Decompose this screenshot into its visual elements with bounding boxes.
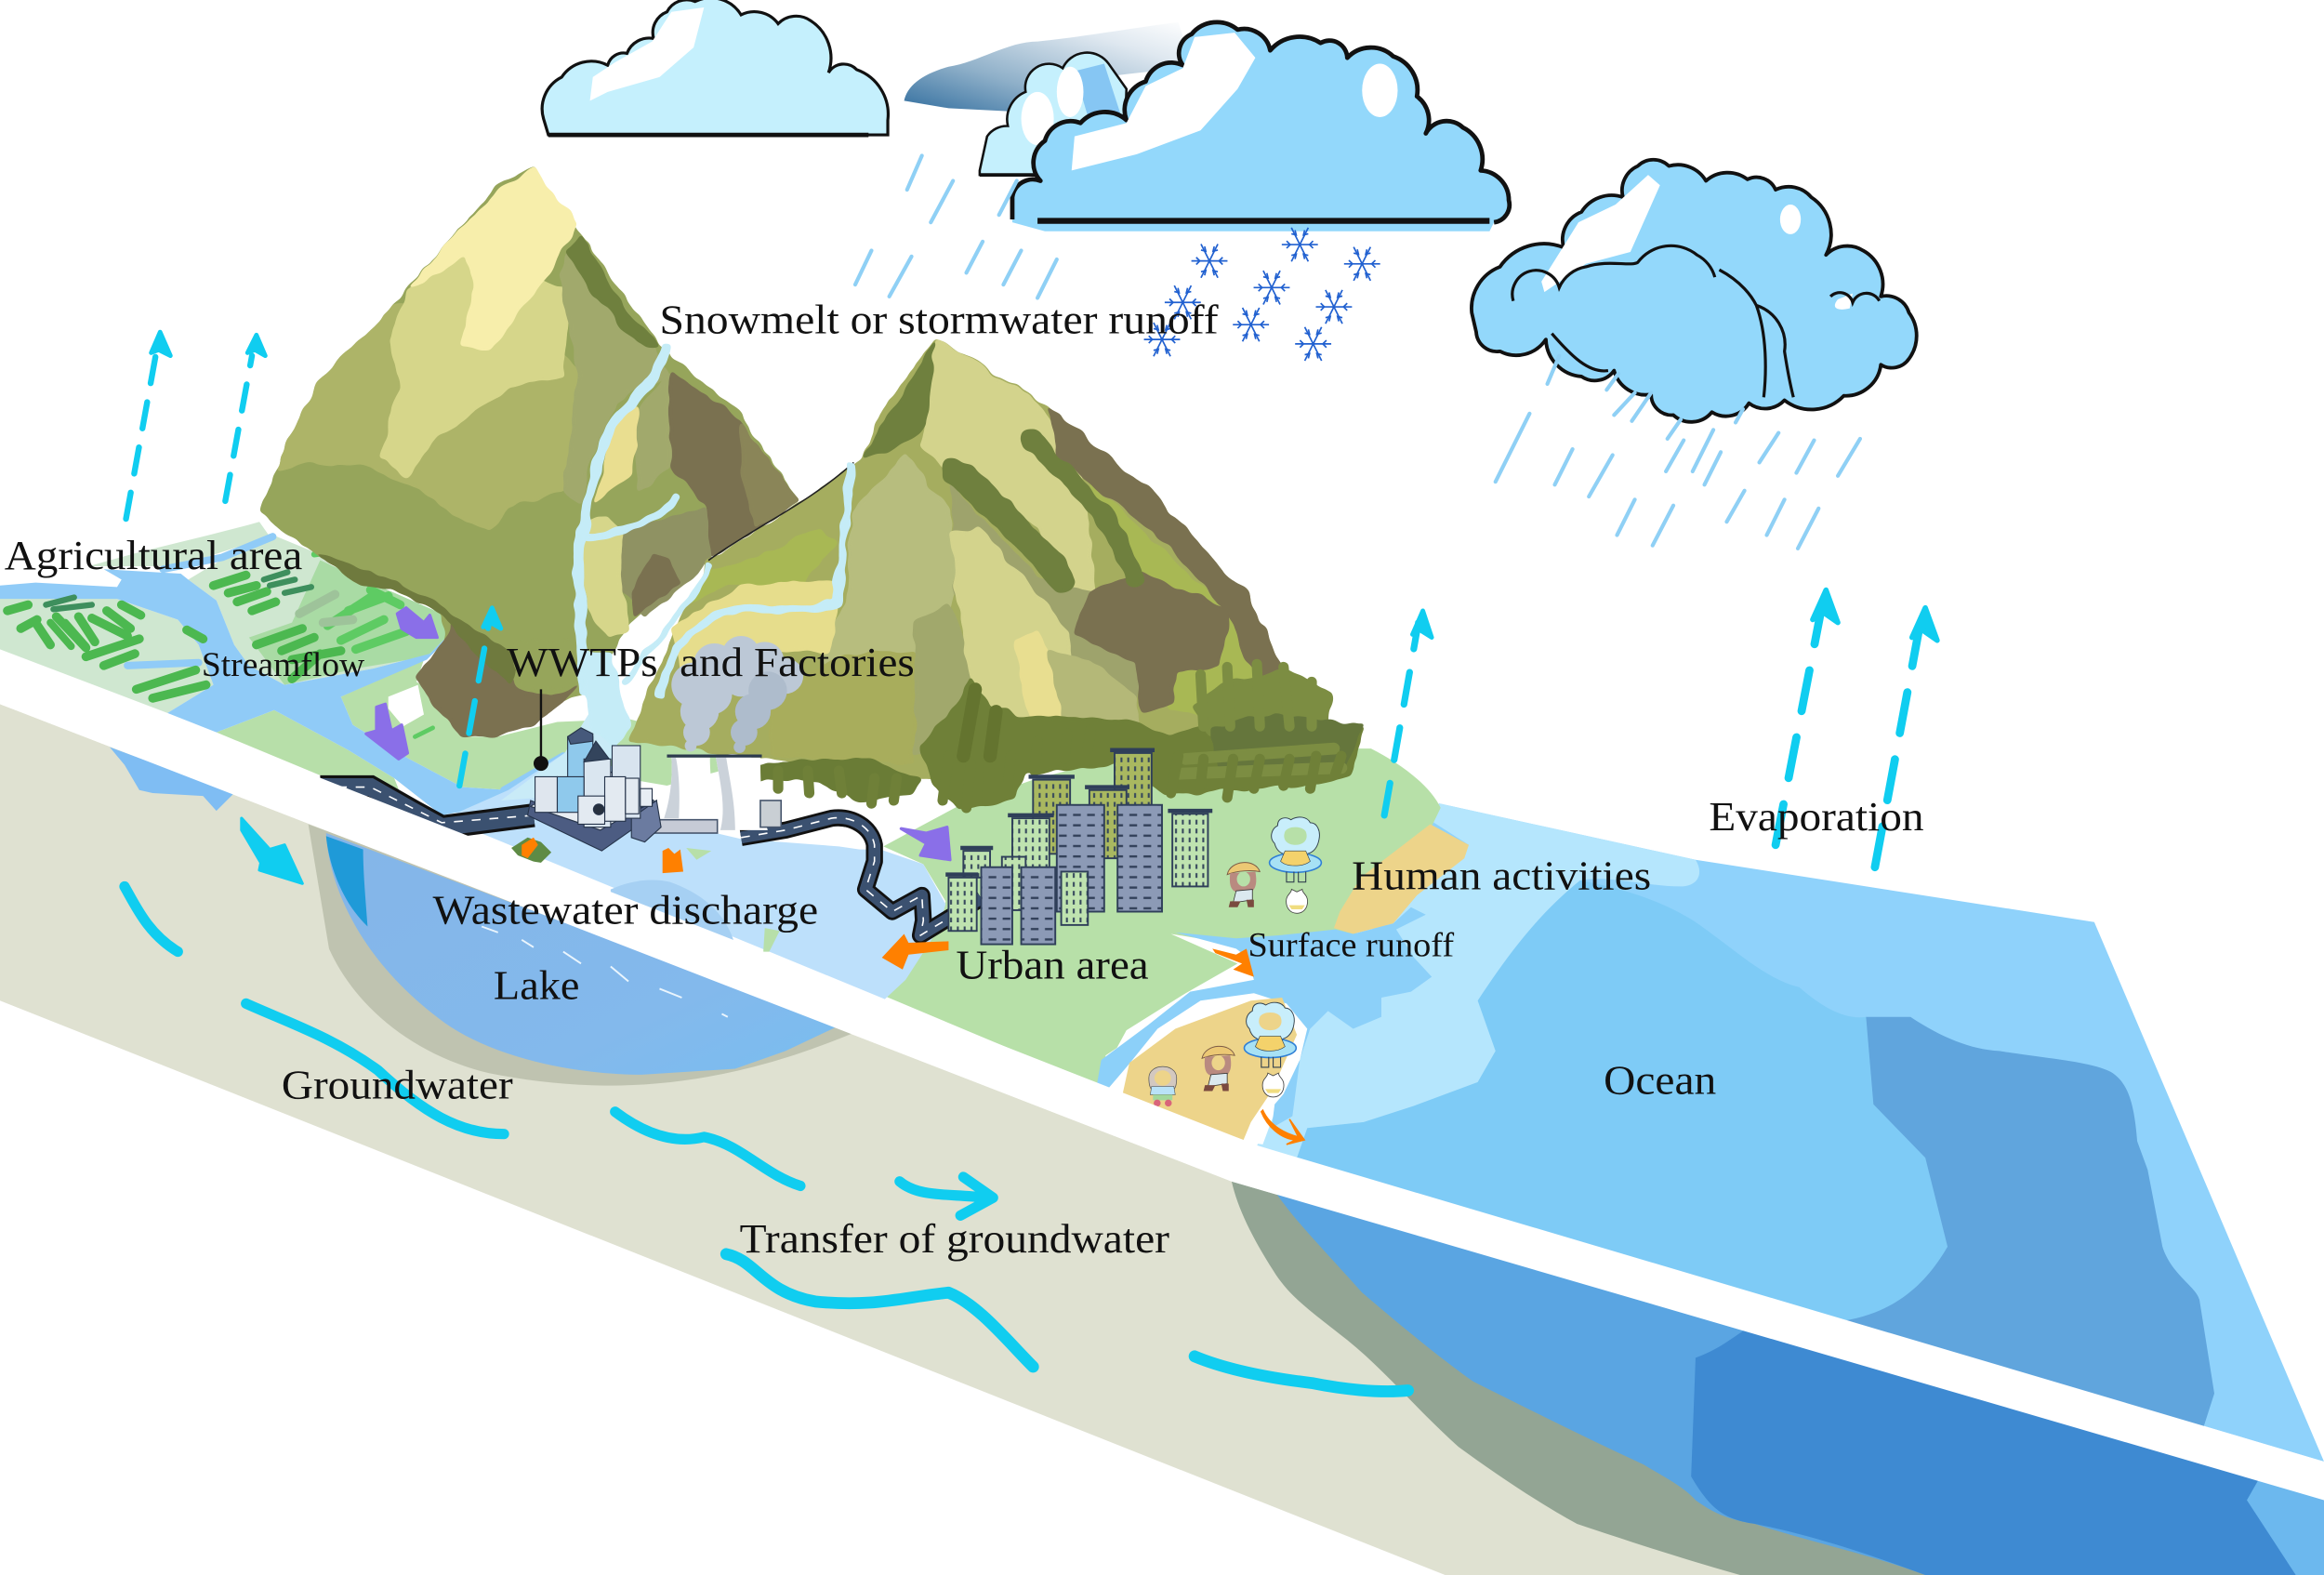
coastal shallows [1257,803,1699,1158]
divider: white surface strip [0,653,2324,1500]
icon: cloud small left [542,0,888,135]
icon: cloud large [1012,22,1510,232]
arrows: evaporation dashed [126,332,1937,867]
label: WWTPs and factories: WWTPs and Factories [507,639,915,685]
panel: land surface [0,522,1469,1145]
beach south [1122,998,1297,1140]
cloud inner outlines [1512,245,1880,397]
label: snowmelt: Snowmelt or stormwater runoff [660,297,1219,343]
icon: WWTP building complex [528,728,661,851]
crop rows [7,551,433,736]
icon: green land stubs under plant [511,838,711,863]
icon: left mountain [259,167,800,736]
labels [5,297,1924,1262]
label: wastewater discharge: Wastewater discharge [433,886,818,933]
icon: gray storm cloud [905,22,1193,112]
icon: cloud right [1472,160,1917,422]
icon: cloud middle back [980,53,1127,175]
icon: waterfalls [578,344,852,748]
small stream section [110,748,234,811]
icon: road left [320,788,534,827]
pale waterfall outflow [501,708,630,801]
urban green land [883,748,1441,1085]
arrows: purple inflow [366,608,950,860]
icon: snowflakes [1144,228,1380,361]
lake cross-section rim [309,824,860,1086]
thin channel [127,536,563,790]
icon: people at urban area [1227,817,1321,913]
label: lake: Lake [494,962,579,1009]
darker lake patch [611,880,735,946]
pale farmland left [0,593,214,713]
ocean medium depth zone [1297,880,1948,1322]
lake waves [482,926,728,1017]
deep sea cross-section [1691,1329,2296,1575]
ocean deep zone [1843,1017,2214,1431]
panel: underground cross-section [0,704,2324,1575]
inland green land lower [217,710,400,793]
label: evaporation: Evaporation [1709,793,1924,840]
wastewater lake surface [444,753,945,999]
rain under left clouds [855,155,1057,298]
icon: road right [741,818,981,935]
label: agricultural area: Agricultural area [5,532,302,578]
icon: right mountain [628,338,1292,778]
river and streamflow [0,569,508,815]
label: transfer of groundwater: Transfer of groundwater [740,1215,1169,1262]
arrows: orange runoff [522,838,1304,1145]
label: ocean: Ocean [1604,1057,1716,1104]
sand north [1334,824,1469,933]
label: streamflow: Streamflow [202,645,365,683]
label: groundwater: Groundwater [282,1061,513,1107]
white shore [1100,985,1304,1145]
icon: cooling towers and factory [653,756,781,833]
inland green land upper [341,659,720,790]
bedrock band [1232,1182,2324,1575]
trees forest [756,664,1364,810]
mountain ridge line [708,462,853,561]
sea cross-section [1276,1193,2324,1575]
label: urban area: Urban area [956,941,1149,987]
icon: urban towers [945,750,1212,945]
greener farmland [249,561,452,685]
label: human activities: Human activities [1352,853,1651,899]
pale farmland upper [188,534,452,685]
icon: people on beach [1149,1002,1296,1106]
panel: ocean surface [1257,803,2324,1462]
rain under right cloud [1496,356,1860,549]
callout: WWTP leader line [534,689,548,771]
label: surface runoff: Surface runoff [1248,925,1455,963]
icon: smoke plumes [671,636,803,753]
pale band above river [89,522,270,566]
arrows: groundwater flow [125,818,1408,1392]
lake water [326,833,838,1075]
stream into sea [1097,907,1432,1128]
white gaps by mountain foot [389,685,424,726]
